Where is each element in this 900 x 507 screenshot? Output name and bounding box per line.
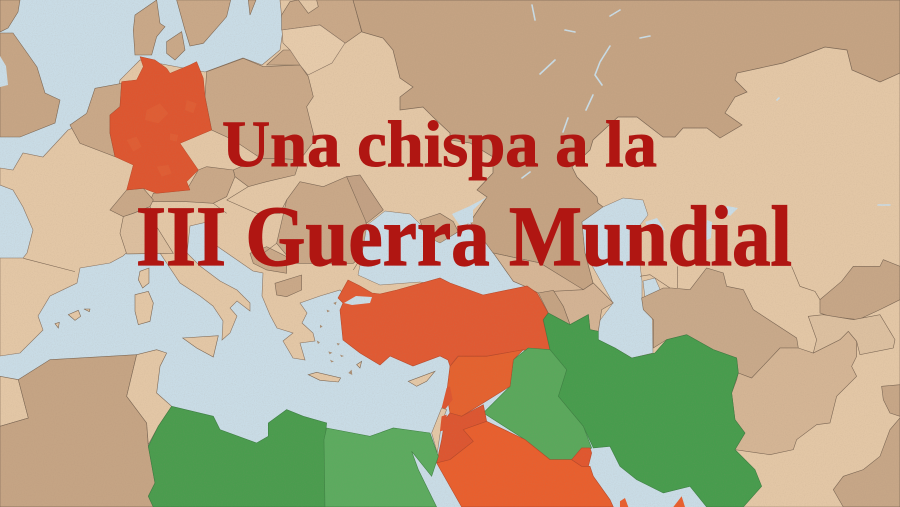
land: Denmark [133, 0, 165, 55]
sea: Caspian Sea [582, 198, 653, 358]
land: Austria [150, 167, 235, 203]
United Arab Emirates [673, 496, 685, 507]
sea: Kara-Bogaz bay [643, 278, 663, 298]
Morocco [0, 376, 28, 426]
land: Kyrgyzstan [820, 260, 900, 320]
Lebanon [442, 386, 453, 410]
lake: Aral Sea [705, 220, 712, 241]
Turkey [338, 278, 550, 366]
land: Danish islands [167, 32, 185, 60]
land: Moldova [347, 175, 383, 223]
island: Rhodes [357, 361, 362, 368]
Israel [432, 408, 447, 453]
land: Nordic and Baltic north [23, 0, 458, 297]
borders: Europe light countries [23, 187, 363, 272]
island: Ibiza [55, 322, 59, 328]
Qatar [620, 498, 628, 507]
land: Afghanistan [732, 331, 857, 455]
Iraq [483, 348, 592, 460]
Libya [148, 406, 327, 507]
Saudi Arabia [437, 421, 613, 507]
land: Kashmir [882, 385, 900, 416]
land: Bosnia [250, 247, 287, 273]
land: northern Italy [120, 207, 173, 254]
island: Menorca [84, 309, 90, 312]
West Bank [440, 415, 447, 431]
land: Tajikistan [808, 315, 895, 355]
island: Mallorca [68, 310, 81, 320]
texture: Germany speckle [127, 100, 197, 177]
islands: Aegean [317, 302, 352, 375]
Iran [543, 313, 762, 507]
border: Uzbekistan and Kazakhstan [640, 266, 820, 300]
Aegean and Med islands [55, 268, 435, 386]
island: Corsica [138, 268, 149, 288]
land: United Kingdom [0, 33, 60, 137]
land: Azerbaijan [553, 283, 613, 331]
land: Baltic states north [282, 0, 362, 43]
lake: Aral north [724, 206, 738, 216]
island: Cyprus [408, 371, 435, 386]
island: Sardinia [135, 291, 153, 325]
land: Poland [205, 58, 315, 160]
sea: Sea of Azov [452, 197, 487, 226]
Syria [447, 350, 523, 416]
title line 1: Una chispa a la [222, 108, 657, 181]
sea: Black Sea [358, 211, 527, 300]
land: Lithuania light [282, 25, 345, 75]
Algeria [0, 355, 155, 507]
land: Crimea [420, 213, 458, 243]
title line 2: III Guerra Mundial [136, 188, 792, 284]
land: Kaliningrad [267, 50, 300, 65]
lake: north Caspian basin [645, 218, 665, 232]
land: Gotland [248, 0, 256, 15]
land: Sweden [177, 0, 231, 46]
land: India [833, 418, 900, 507]
Tunisia [127, 350, 172, 445]
land: Russia [353, 0, 900, 290]
Central Asia and Caucasus [493, 253, 900, 507]
lakes and rivers [522, 5, 890, 205]
sea: Marmara [344, 296, 372, 305]
land: Turkmenistan [642, 268, 798, 378]
Kuwait [572, 448, 592, 466]
land: Scotland edge [0, 0, 20, 32]
land: Germany [110, 57, 212, 193]
land: Switzerland [110, 188, 153, 217]
Levant [432, 386, 453, 453]
land: Macedonia [275, 275, 302, 297]
island: Sicily [183, 336, 218, 357]
island: Crete [308, 372, 341, 382]
North Africa [0, 268, 438, 507]
land: Romania [277, 177, 367, 263]
Middle East [437, 313, 762, 507]
Jordan [437, 405, 487, 463]
land: Armenia [538, 290, 570, 325]
land: Georgia [493, 253, 583, 293]
Egypt [324, 428, 438, 507]
land: Slovakia [233, 158, 300, 187]
sea inlet: Irish Sea [0, 56, 8, 87]
land: Benelux [70, 83, 122, 157]
